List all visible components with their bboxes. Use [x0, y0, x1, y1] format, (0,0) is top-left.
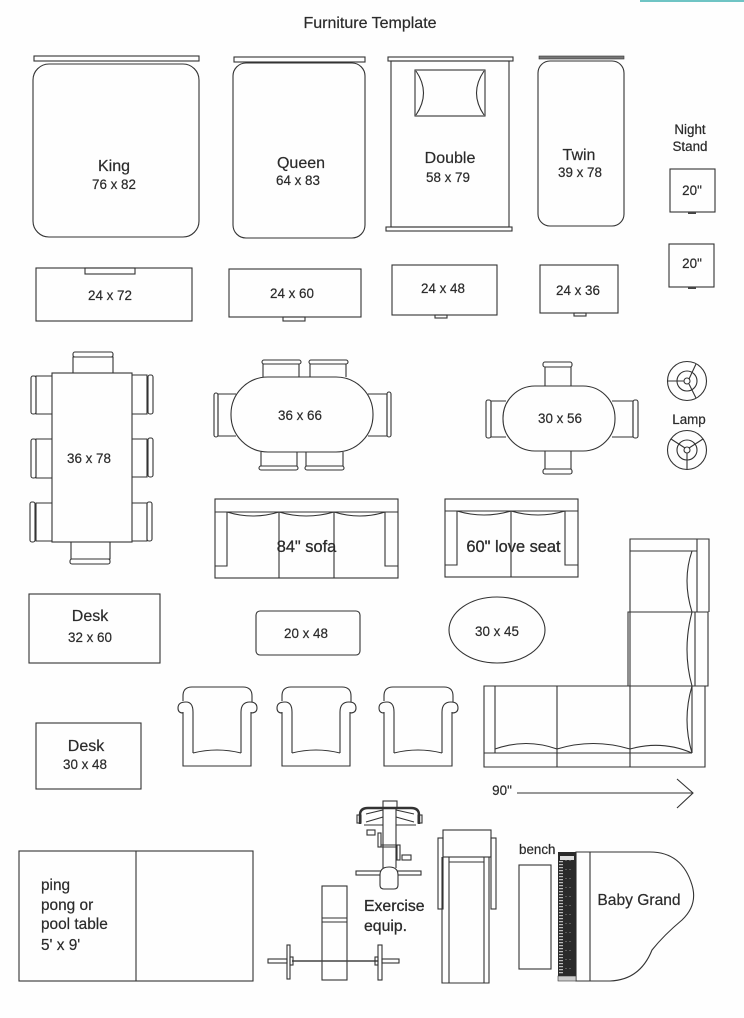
night stand 2: 20" [682, 256, 702, 271]
armchair 1 [178, 687, 257, 766]
90 inch dimension arrow: 90" [492, 783, 512, 798]
night stand 2 [669, 244, 714, 289]
oval dining table 30 x 56: 30 x 56 [538, 411, 582, 426]
ping pong or pool table: pong or [41, 897, 93, 914]
table 20 x 48 [256, 611, 360, 655]
queen bed: 64 x 83 [276, 173, 320, 188]
ping pong or pool table: pool table [41, 916, 108, 933]
60 inch love seat [445, 499, 578, 577]
night stand 1 [670, 169, 715, 214]
keyboard [558, 852, 576, 981]
baby grand piano: Baby Grand [597, 892, 681, 909]
double bed: Double [425, 150, 475, 167]
rectangular dining table 36 x 78: 36 x 78 [67, 451, 111, 466]
twin bed [538, 56, 624, 226]
twin bed: 39 x 78 [558, 165, 602, 180]
table 24 x 48 [392, 265, 497, 318]
table 24 x 72 [36, 268, 192, 321]
sectional sofa [484, 539, 709, 767]
king bed: 76 x 82 [92, 177, 136, 192]
ping pong or pool table: 5' x 9' [41, 937, 80, 954]
armchair 3 [379, 687, 458, 766]
twin bed: Twin [563, 147, 595, 164]
oval dining table 36 x 66 [214, 360, 391, 470]
oval table 30 x 45 [449, 597, 545, 663]
queen bed: Queen [277, 155, 325, 172]
desk 30 x 48: Desk [68, 738, 105, 755]
table 24 x 36: 24 x 36 [556, 283, 600, 298]
ping pong or pool table [19, 851, 253, 981]
oval dining table 36 x 66: 36 x 66 [278, 408, 322, 423]
desk 32 x 60 [29, 594, 160, 663]
desk 32 x 60: 32 x 60 [68, 630, 112, 645]
double bed [386, 57, 513, 231]
lamp label: Lamp [672, 412, 706, 427]
night stand label: Night [674, 122, 706, 137]
oval dining table 30 x 56 [486, 362, 638, 474]
lamp 2 [668, 430, 706, 470]
rectangular dining table 36 x 78 [30, 352, 153, 564]
double bed: 58 x 79 [426, 170, 470, 185]
treadmill [438, 830, 496, 983]
table 24 x 60: 24 x 60 [270, 286, 314, 301]
night stand 1: 20" [682, 183, 702, 198]
table 24 x 60 [229, 269, 361, 321]
90 inch dimension arrow [492, 779, 693, 808]
desk 32 x 60: Desk [72, 608, 109, 625]
bench label: bench [519, 842, 555, 857]
title: Furniture Template [303, 15, 437, 32]
60 inch love seat: 60" love seat [466, 538, 561, 556]
table 24 x 48: 24 x 48 [421, 281, 465, 296]
84 inch sofa: 84" sofa [277, 538, 337, 556]
armchair 2 [277, 687, 356, 766]
table 24 x 72: 24 x 72 [88, 288, 132, 303]
84 inch sofa [215, 499, 398, 578]
table 24 x 36 [540, 265, 618, 316]
night stand label: Stand [672, 139, 708, 154]
desk 30 x 48: 30 x 48 [63, 757, 107, 772]
piano bench [519, 865, 551, 969]
baby grand piano [558, 852, 694, 981]
oval table 30 x 45: 30 x 45 [475, 624, 519, 639]
exercise equipment label: Exercise [364, 898, 425, 915]
exercise bike [356, 801, 422, 889]
king bed [33, 56, 199, 237]
exercise equipment label: equip. [364, 918, 407, 935]
king bed: King [98, 158, 130, 175]
desk 30 x 48 [36, 723, 141, 789]
table 20 x 48: 20 x 48 [284, 626, 328, 641]
weight bench and barbell [268, 886, 399, 980]
queen bed [233, 57, 365, 238]
lamp 1 [668, 362, 706, 400]
ping pong or pool table: ping [41, 877, 70, 894]
